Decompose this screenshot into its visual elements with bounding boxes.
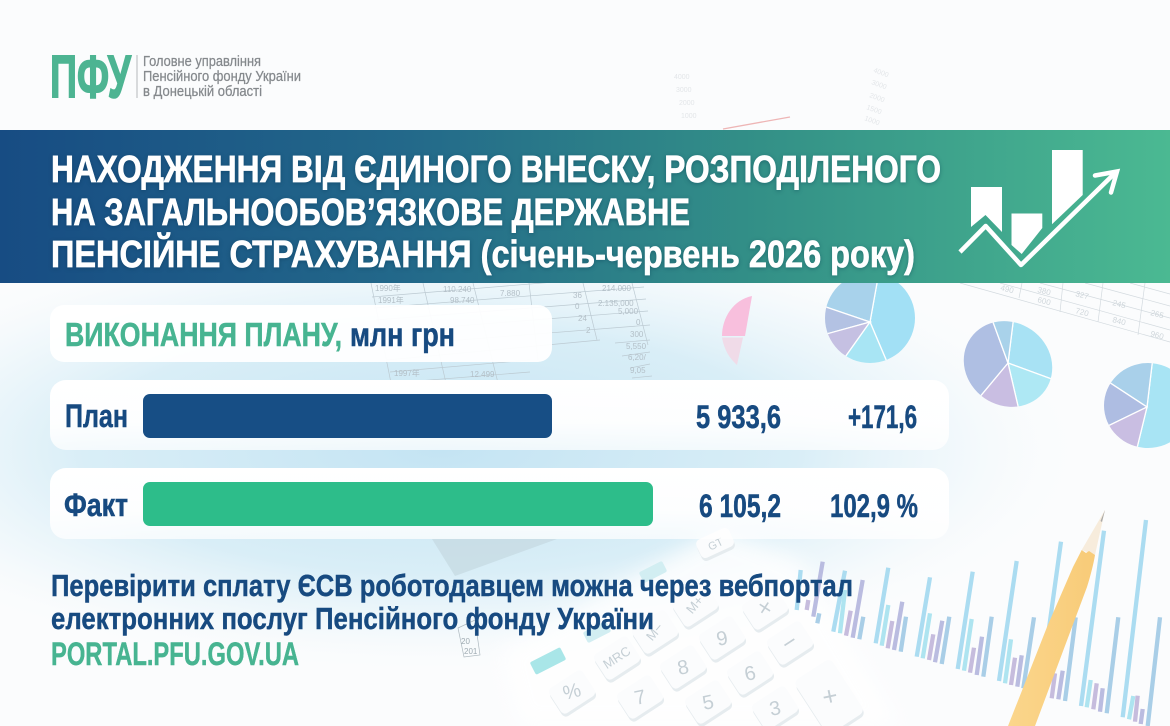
background photo: faint chart above banner: 4000: [674, 74, 690, 81]
logo text: Пенсійного фонду України: [143, 69, 301, 85]
background photo: spreadsheet: 36: [573, 291, 582, 300]
background photo: faint chart above banner: 1500: [865, 104, 882, 116]
background photo: spreadsheet: 9,05: [630, 366, 646, 375]
logo mark: ПФУ: [50, 44, 131, 110]
background photo: table top right: 327: [1074, 289, 1090, 302]
background photo: spreadsheet: 12.499: [470, 370, 495, 379]
background photo: spreadsheet: 2.135,000: [598, 299, 634, 308]
text block: portal note: електронних послуг Пенсійного фонду України: [51, 601, 654, 636]
calculator keys: 3: [767, 697, 783, 721]
calculator keys: [547, 526, 866, 726]
background photo: table top right: 720: [1074, 306, 1090, 319]
calculator keys: M−: [643, 620, 666, 644]
background photo: faint chart above banner: 2000: [679, 100, 695, 107]
calculator small scale: 201: [464, 647, 478, 656]
label: actual: Факт: [64, 487, 128, 523]
title: НА ЗАГАЛЬНООБОВ’ЯЗКОВЕ ДЕРЖАВНЕ: [51, 192, 690, 234]
calculator keys: M+: [683, 593, 706, 617]
background photo: table top right: 490: [999, 283, 1015, 296]
logo text: Головне управління: [143, 54, 261, 70]
calculator keys: 5: [700, 691, 716, 715]
background photo: spreadsheet: 0: [636, 318, 641, 327]
icon: growth chart with arrow: [960, 150, 1117, 265]
background photo: spreadsheet: 2: [586, 326, 591, 335]
background photo: faint chart above banner: 2000: [868, 92, 885, 104]
background photo: pencil: [1008, 510, 1105, 726]
background photo: spreadsheet: 1991年: [378, 295, 404, 305]
calculator keys: GT: [706, 536, 726, 553]
background photo: faint chart above banner: 1000: [681, 113, 697, 120]
background photo: spreadsheet: 1990年: [375, 283, 401, 293]
background photo: spreadsheet: 98.740: [450, 296, 475, 305]
background photo: spreadsheet: 7.880: [500, 289, 521, 298]
calculator small scale: 20: [461, 637, 470, 646]
background photo: spreadsheet: 6,20/: [628, 353, 647, 362]
background photo: spreadsheet: 1997年: [394, 368, 420, 378]
calculator small scale: [458, 620, 480, 657]
background photo: table top right: 960: [1149, 329, 1165, 342]
pie chart 3: [1104, 363, 1170, 448]
background photo: faint chart above banner: 4000: [872, 67, 889, 79]
label: plan: План: [65, 398, 128, 434]
background photo: table top right: [960, 283, 1170, 342]
background photo: bar chart: [797, 520, 1160, 726]
panel: plan heading: [50, 305, 552, 362]
bar: actual: [143, 482, 653, 526]
value: actual: 6 105,2: [699, 488, 781, 524]
panel: plan row: [50, 380, 949, 450]
background photo: spreadsheet: 5,550: [626, 342, 647, 351]
text block: portal note: PORTAL.PFU.GOV.UA: [51, 636, 299, 672]
background photo: table top right: 600: [1036, 295, 1052, 308]
title: НАХОДЖЕННЯ ВІД ЄДИНОГО ВНЕСКУ, РОЗПОДІЛЕНОГО: [51, 149, 941, 191]
background photo: spreadsheet: 5,000: [618, 307, 639, 316]
background photo: spreadsheet: 300: [630, 330, 644, 339]
calculator keys: 8: [675, 656, 691, 680]
text block: portal note: [51, 568, 853, 672]
logo text: в Донецькій області: [143, 84, 262, 100]
background photo: table top right: 380: [1036, 285, 1052, 298]
background photo: faint chart above banner: 3000: [676, 87, 692, 94]
logo text: [143, 54, 301, 100]
pie chart 1: [825, 283, 915, 363]
panel: actual row: [50, 468, 949, 539]
bar: plan: [143, 394, 552, 438]
banner: [0, 130, 1170, 283]
background photo: grey shadow shape: [432, 539, 557, 576]
background photo: calculator: [458, 526, 900, 726]
calculator keys: 7: [632, 686, 648, 710]
value: difference: +171,6: [848, 399, 917, 435]
text block: portal note: Перевірити сплату ЄСВ роботодавцем можна через вебпортал: [51, 568, 853, 603]
title: ПЕНСІЙНЕ СТРАХУВАННЯ (січень-червень 2026 року): [51, 231, 915, 276]
pie chart 2: [964, 321, 1052, 407]
heading unit: млн грн: [350, 316, 455, 353]
value: percent: 102,9 %: [830, 488, 918, 524]
title: [51, 149, 941, 276]
background photo: table top right: 840: [1111, 315, 1127, 328]
icon: pink half pie: [722, 296, 752, 365]
calculator keys: 9: [714, 627, 730, 651]
background photo: spreadsheet: 214.000: [602, 284, 631, 293]
calculator keys: ×: [756, 594, 774, 621]
calculator keys: −: [776, 627, 803, 658]
background photo: table top right: 265: [1149, 308, 1165, 321]
logo: [50, 44, 301, 110]
background photo: spreadsheet: 0: [575, 302, 580, 311]
background photo: spreadsheet: 24: [578, 314, 587, 323]
calculator keys: 6: [742, 662, 758, 686]
calculator keys: MRC: [600, 643, 633, 672]
background photo: faint chart above banner: 1000: [863, 115, 880, 127]
background photo: faint chart above banner: [674, 67, 889, 129]
background photo: spreadsheet: 110.240: [443, 285, 472, 294]
calculator keys: %: [561, 679, 584, 705]
background photo: table top right: 245: [1111, 298, 1127, 311]
background photo: spreadsheet: [370, 283, 652, 380]
calculator keys: +: [819, 680, 840, 712]
heading text: ВИКОНАННЯ ПЛАНУ,: [65, 316, 342, 353]
calculator display buttons: [530, 561, 667, 675]
background photo: faint chart above banner: 3000: [870, 79, 887, 91]
value: plan: 5 933,6: [696, 399, 781, 435]
